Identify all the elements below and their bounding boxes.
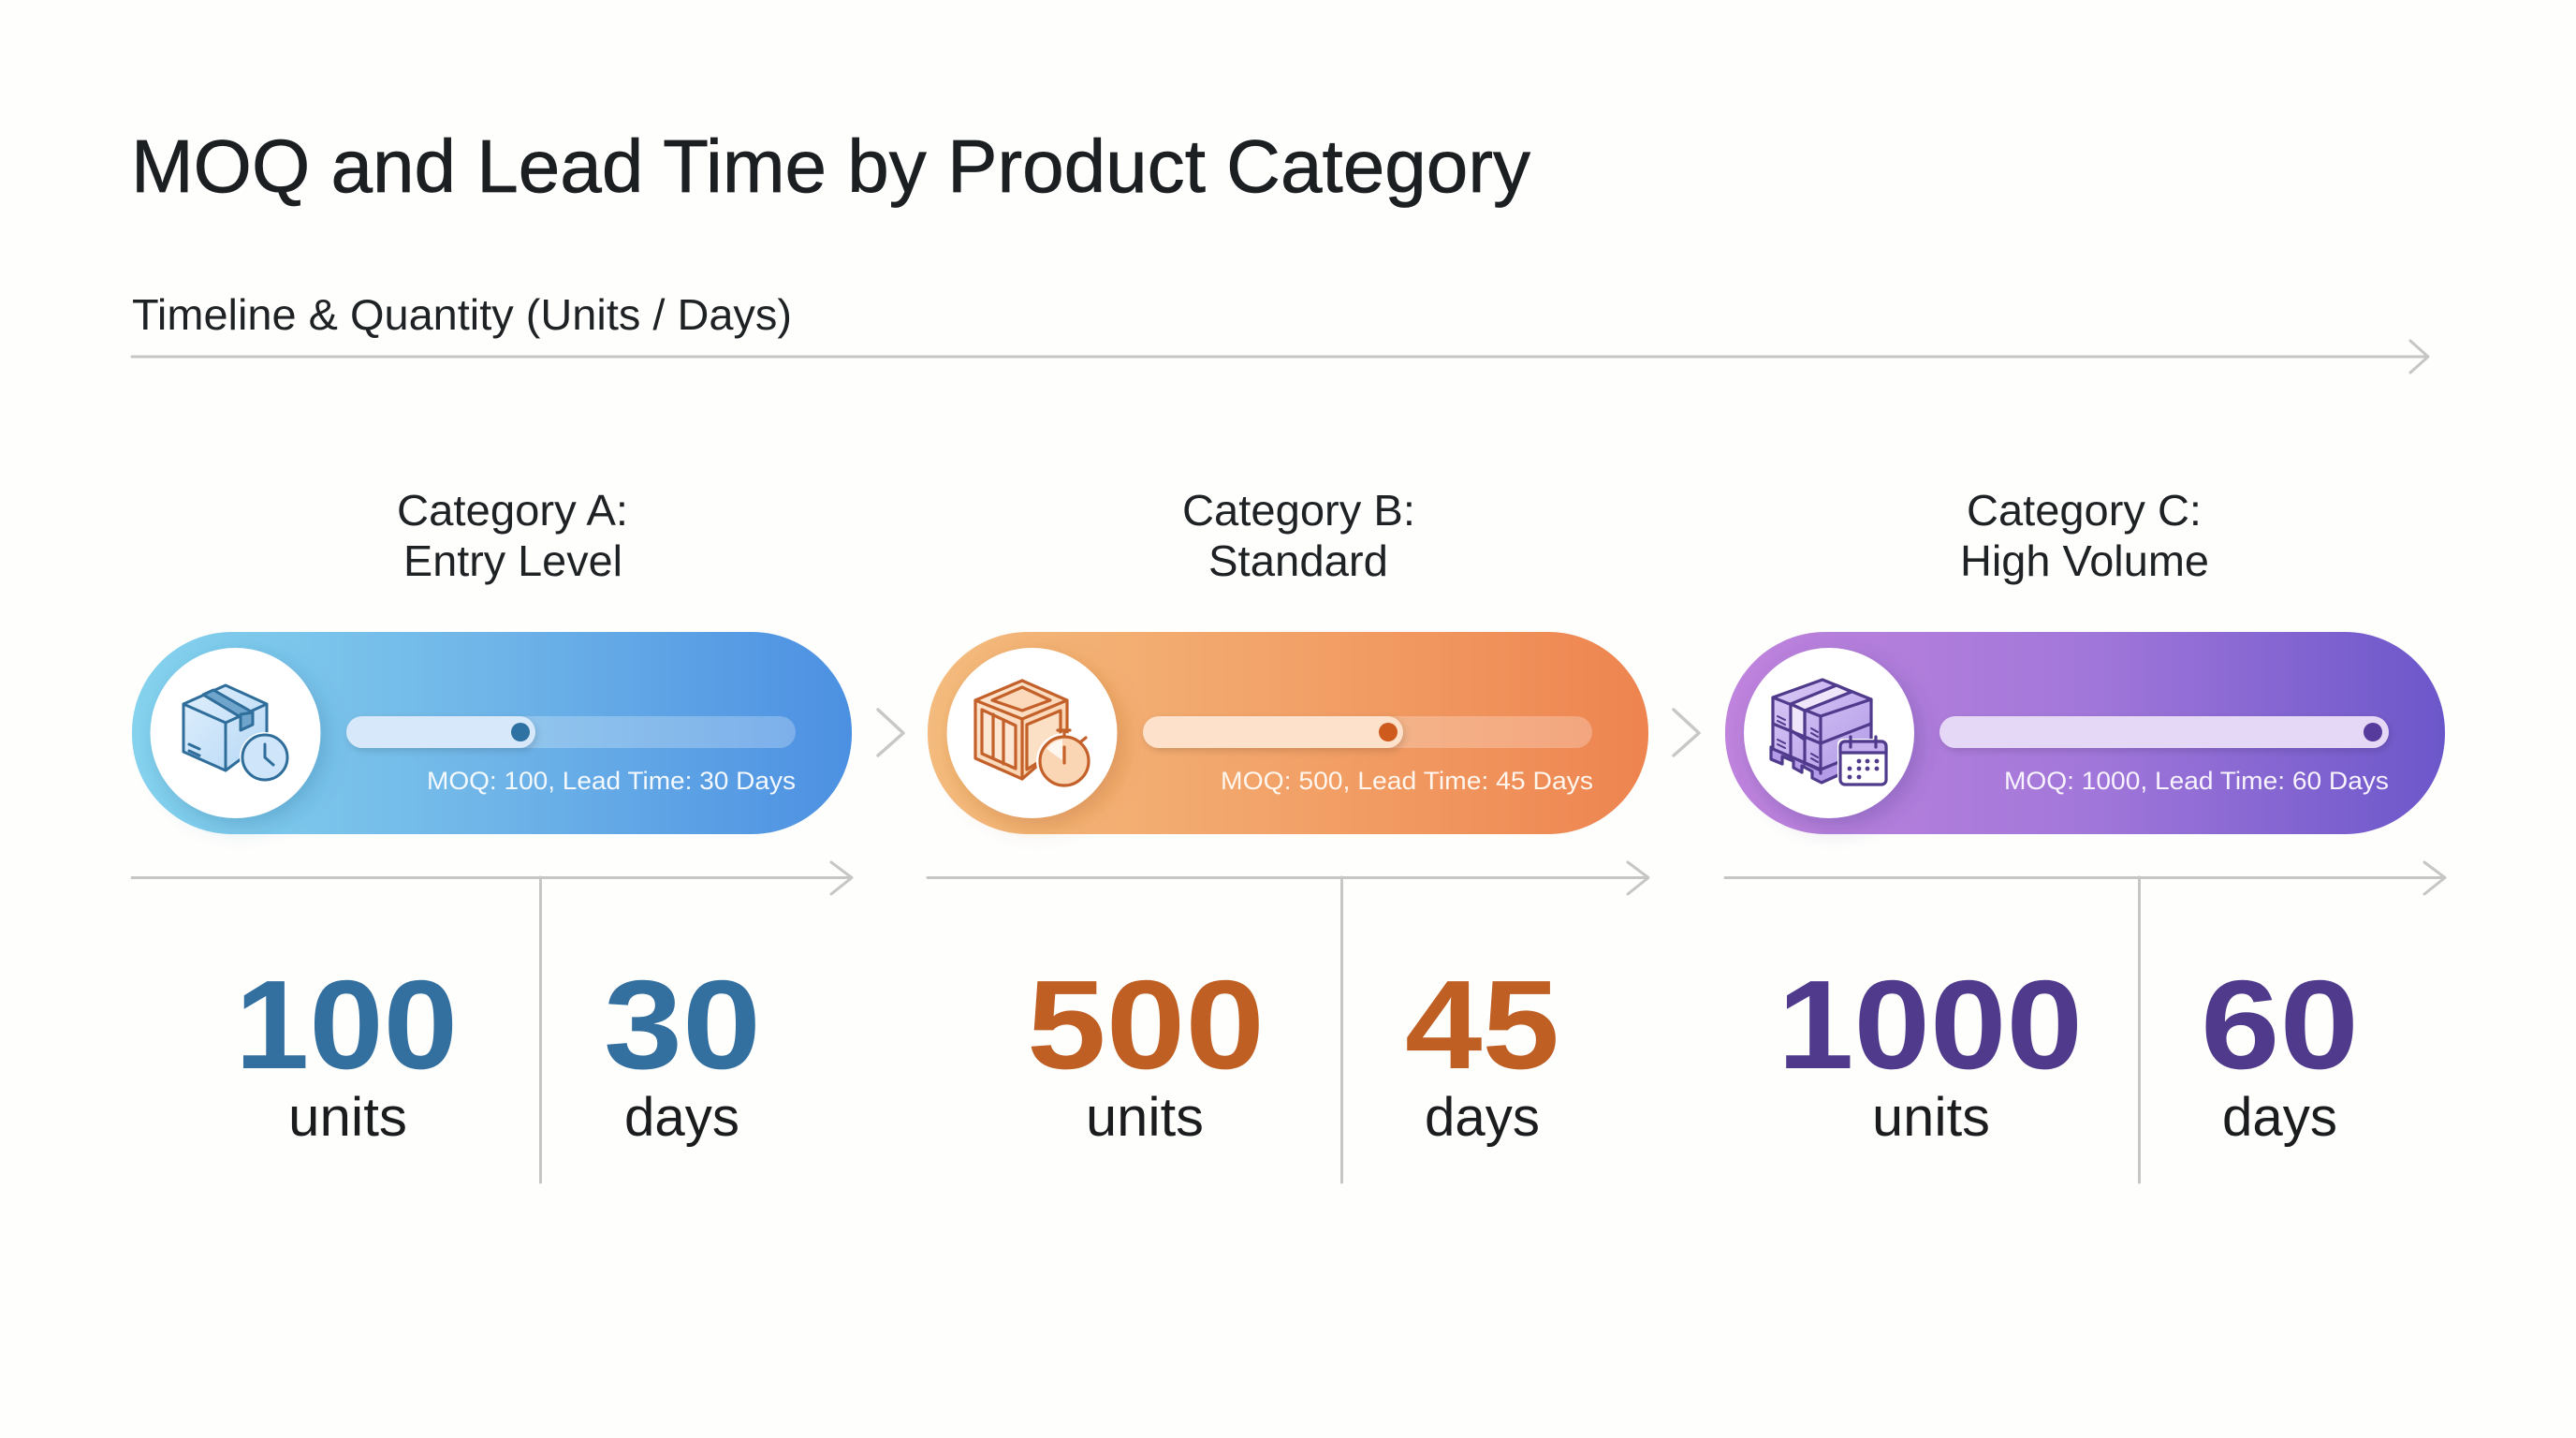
stat: 45 days: 45 [1405,954,1559,1095]
heading: Category A: Entry Level [403,536,622,585]
progress fill C [1939,716,2389,748]
stat: 30 days: 30 [604,954,761,1095]
stat: 60 days [2201,954,2359,1148]
gradient pill C [1725,632,2445,834]
heading: Category A: Category A: [397,486,628,535]
progress knob B [1379,723,1398,741]
gradient pill A [132,632,852,834]
stat: 1000 units: 1000 [1778,954,2083,1095]
arrow: B sub-axis [928,862,1648,1182]
caption B: MOQ: 500, Lead Time: 45 Days [1221,767,1593,795]
icon circle A [150,648,320,818]
progress knob C [2364,723,2382,741]
heading: Category B [1182,486,1415,585]
stat: 60 days: 60 [2201,954,2359,1095]
heading: Category C [1960,486,2209,585]
icon: crate with stopwatch [975,681,1092,789]
progress fill B [1143,716,1403,748]
icon circle B [947,648,1118,818]
stat: 45 days [1405,954,1559,1148]
panel: Category B [928,486,1648,1182]
progress knob A [511,723,530,741]
stat: 100 units: 100 [235,954,458,1095]
stat: 100 units: units [288,1087,407,1148]
arrow: C sub-axis [1725,862,2445,1182]
stat: 100 units [235,954,458,1148]
stat: 500 units: units [1086,1087,1204,1148]
heading: Category C: Category C: [1967,486,2202,535]
caption C: MOQ: 1000, Lead Time: 60 Days [2004,767,2389,795]
progress fill A [346,716,535,748]
stat: 30 days [604,954,761,1148]
arrow: chevron B to C [1674,710,1699,756]
heading: Category A [397,486,628,585]
progress track B [1143,716,1592,748]
caption A: MOQ: 100, Lead Time: 30 Days [427,767,796,795]
icon circle C [1744,648,1914,818]
panel: Category A [132,486,852,1182]
arrow: chevron A to B [878,710,903,756]
arrow: main timeline axis [132,341,2428,373]
arrow: A sub-axis [132,862,852,1182]
panel: Category C [1725,486,2445,1182]
gradient pill B [928,632,1648,834]
progress track A [346,716,796,748]
stat: 1000 units: units [1872,1087,1990,1148]
stat: 45 days: days [1425,1087,1540,1148]
heading: Category C: High Volume [1960,536,2209,585]
heading: Category B: Category B: [1182,486,1415,535]
axis label: Timeline & Quantity (Units / Days) [132,290,792,339]
stat: 60 days: days [2222,1087,2337,1148]
stat: 1000 units [1778,954,2083,1148]
progress track C [1939,716,2389,748]
heading: Category B: Standard [1208,536,1388,585]
stat: 500 units: 500 [1027,954,1265,1095]
stat: 500 units [1027,954,1265,1148]
stat: 30 days: days [624,1087,739,1148]
icon: box with clock [183,685,290,783]
title: MOQ and Lead Time by Product Category [131,125,1530,208]
icon: pallet with calendar [1771,680,1889,787]
